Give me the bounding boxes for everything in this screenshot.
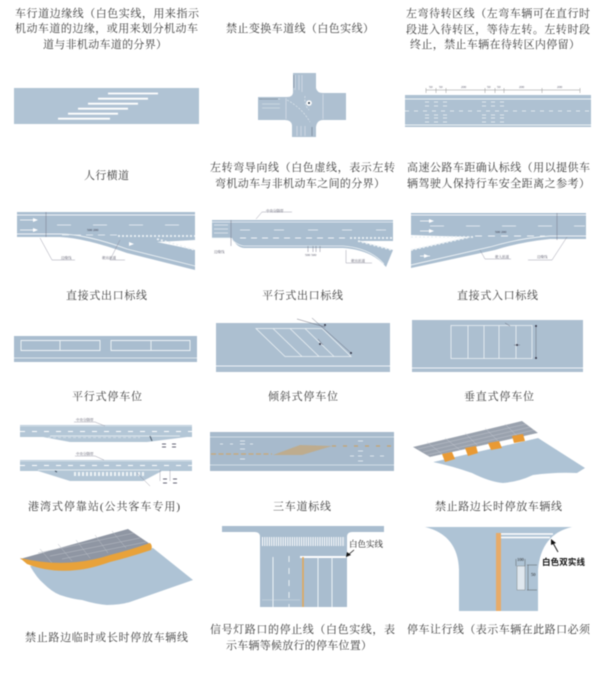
caption: direct entrance: 直接式入口标线 [457, 288, 538, 302]
caption: yield line: 停车让行线（表示车辆在此路口必须 [407, 622, 591, 636]
caption: expressway distance confirmation: 辆驾驶人保持行车安全距离之参考） [407, 176, 590, 190]
panel: parallel exit markings: 边缘线 [214, 249, 225, 254]
panel: direct entrance markings: 500 200 [495, 230, 507, 234]
panel: direct entrance markings: 驶入匝道 [495, 254, 509, 259]
panel: parallel parking [14, 336, 197, 362]
panel: bus bay [20, 417, 192, 486]
panel: parallel exit markings: 中央分隔带 [266, 208, 284, 213]
caption: parallel exit: 平行式出口标线 [262, 288, 343, 302]
panel: angled parking [216, 318, 390, 372]
panel: no temporary or long-term parking curb [20, 529, 193, 605]
caption: angled parking: 倾斜式停车位 [268, 389, 338, 403]
panel: direct exit markings [17, 212, 195, 270]
caption: bus bay: 港湾式停靠站(公共客车专用) [28, 499, 180, 513]
label: white solid line [346, 539, 383, 557]
label: white double solid line: 白色双实线 [542, 557, 585, 567]
panel: three lane markings [210, 432, 394, 471]
caption: left turn guide line: 左转弯导向线（白色虚线，表示左转 [210, 160, 395, 174]
panel: parallel exit markings [212, 208, 393, 267]
panel: roadway edge line caption: 车行道边缘线（白色实线，用来指示 [15, 6, 200, 20]
caption: stop line [210, 622, 395, 652]
panel: direct entrance markings: 边缘线 [537, 254, 548, 259]
caption: parallel parking: 平行式停车位 [72, 389, 142, 403]
caption: no temporary or long-term parking: 禁止路边临时或长时停放车辆线 [25, 630, 188, 644]
panel: direct exit markings: 驶出匝道 [102, 255, 116, 260]
caption: left turn waiting area [406, 6, 590, 51]
caption: left turn waiting area: 终止，禁止车辆在待转区内停留） [410, 37, 580, 51]
label: white solid line: 白色实线 [349, 539, 383, 549]
panel: direct exit markings: 边缘线 [61, 255, 72, 260]
caption: three lanes: 三车道标线 [273, 499, 331, 513]
caption: direct exit: 直接式出口标线 [66, 288, 147, 302]
panel: left turn waiting lane markings [405, 85, 591, 127]
caption: expressway distance confirmation: 高速公路车距确认标线（用以提供车 [407, 160, 590, 174]
caption: left turn waiting area: 左弯待转区线（左弯车辆可在直行时 [406, 6, 590, 20]
panel: direct entrance markings [411, 213, 586, 268]
label: white double solid line [542, 539, 585, 567]
panel: roadway edge line caption: 机动车道的边缘，或用来划分机动车 [15, 21, 198, 35]
caption: pedestrian crossing: 人行横道 [84, 168, 129, 182]
panel: left turn waiting lane markings: 200 [519, 85, 524, 89]
panel: left turn waiting lane markings: 50 [497, 85, 501, 89]
panel: left turn waiting lane markings: 50 [429, 85, 433, 89]
caption: no long-term roadside parking: 禁止路边长时停放车辆线 [435, 499, 562, 513]
panel: parallel exit markings: 500 500 [305, 253, 317, 257]
panel: left turn waiting lane markings: 50 [487, 85, 491, 89]
panel: pedestrian crossing [14, 88, 199, 124]
panel: parallel exit markings: 驶出匝道 [351, 258, 365, 263]
panel: left turn waiting lane markings: 200 [461, 85, 466, 89]
caption: left turn guide line: 弯机动车与非机动车之间的分界） [215, 176, 385, 190]
panel: yield line: 50 [531, 572, 536, 577]
panel: perpendicular parking [412, 320, 583, 372]
panel: direct exit markings: 500 200 [87, 228, 99, 232]
panel: bus bay: 中央分隔带 [76, 451, 94, 456]
caption: stop line: 示车辆等候放行的停车位置） [226, 638, 372, 652]
panel: yield line [425, 527, 572, 611]
panel: no long-term parking curb [413, 421, 585, 483]
panel: roadway edge line caption [15, 6, 200, 51]
caption: left turn guide line [210, 160, 395, 190]
caption: stop line: 信号灯路口的停止线（白色实线，表 [210, 622, 395, 636]
panel: left turn waiting lane markings: 50 [439, 85, 443, 89]
caption: left turn waiting area: 段进入待转区，等待左转。左转时段 [406, 22, 590, 36]
panel: roadway edge line caption: 道与非机动车道的分界） [43, 37, 167, 51]
panel: bus bay: 中央分隔带 [76, 417, 94, 422]
caption: no lane change: 禁止变换车道线（白色实线） [226, 21, 374, 35]
panel: left turn waiting lane markings: 200 [557, 85, 562, 89]
panel: intersection diagram [258, 73, 346, 137]
panel: stop line at signalled intersection [222, 526, 384, 607]
panel: yield line: 100 [517, 557, 524, 562]
caption: perpendicular parking: 垂直式停车位 [464, 389, 534, 403]
caption: expressway distance confirmation [407, 160, 590, 190]
